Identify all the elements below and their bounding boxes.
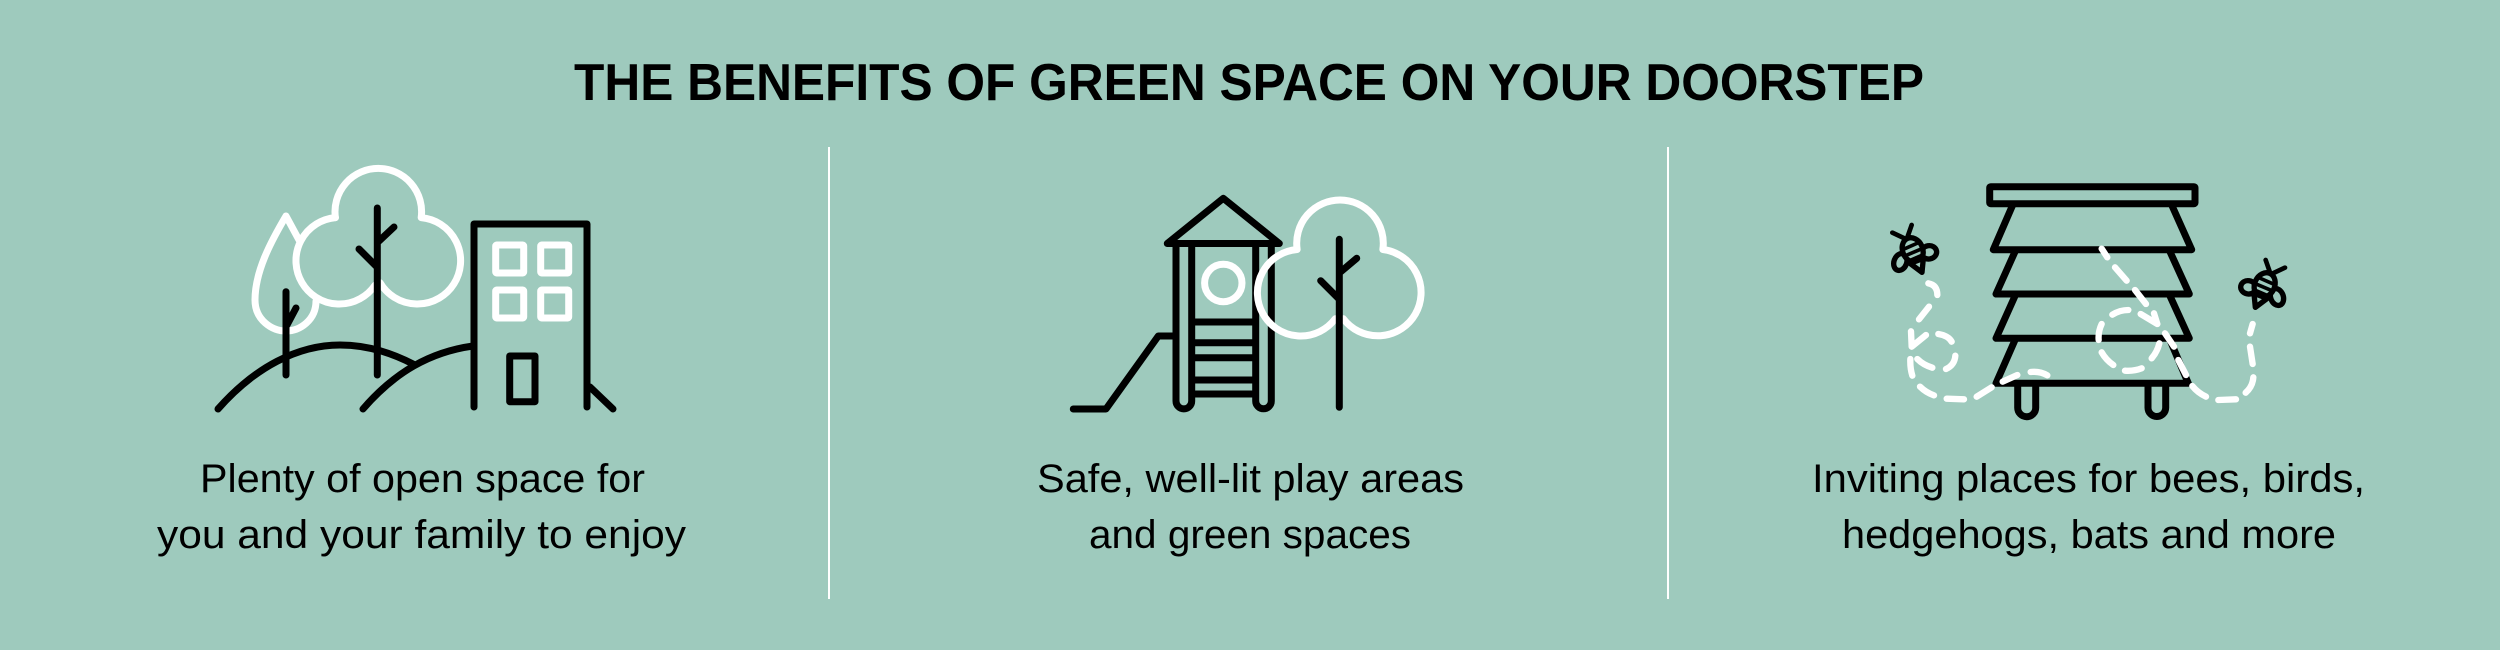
caption: open space: you and your family to enjoy	[157, 513, 686, 557]
white tree canopy	[1257, 200, 1421, 336]
building outline and door	[474, 224, 613, 409]
icon: play tower, slide and tree	[1073, 198, 1421, 409]
panel: open space	[157, 168, 686, 557]
play tower and slide	[1073, 198, 1279, 409]
icon: beehive and bees	[1891, 187, 2286, 417]
white tree canopies	[255, 168, 461, 331]
tree trunk	[1321, 239, 1357, 407]
tower window	[1205, 264, 1242, 302]
panel: play areas	[1037, 198, 1464, 557]
beehive	[1990, 187, 2195, 417]
building windows	[496, 245, 569, 318]
caption: open space: Plenty of open space for	[200, 457, 645, 501]
caption: play areas: Safe, well-lit play areas	[1037, 457, 1464, 501]
caption: wildlife: hedgehogs, bats and more	[1842, 513, 2336, 557]
caption: wildlife	[1812, 457, 2365, 557]
caption: play areas: and green spaces	[1089, 513, 1411, 557]
caption: play areas	[1037, 457, 1464, 557]
dashed bee flight paths	[1910, 249, 2253, 400]
caption: wildlife: Inviting places for bees, birds,	[1812, 457, 2365, 501]
panel: wildlife	[1812, 187, 2365, 557]
bee right	[2240, 260, 2286, 307]
bee left	[1891, 225, 1938, 272]
tree trunks and hills	[218, 208, 473, 409]
icon: trees, hills and building	[218, 168, 613, 409]
caption: open space	[157, 457, 686, 557]
title: THE BENEFITS OF GREEN SPACE ON YOUR DOORSTEP	[574, 54, 1924, 112]
